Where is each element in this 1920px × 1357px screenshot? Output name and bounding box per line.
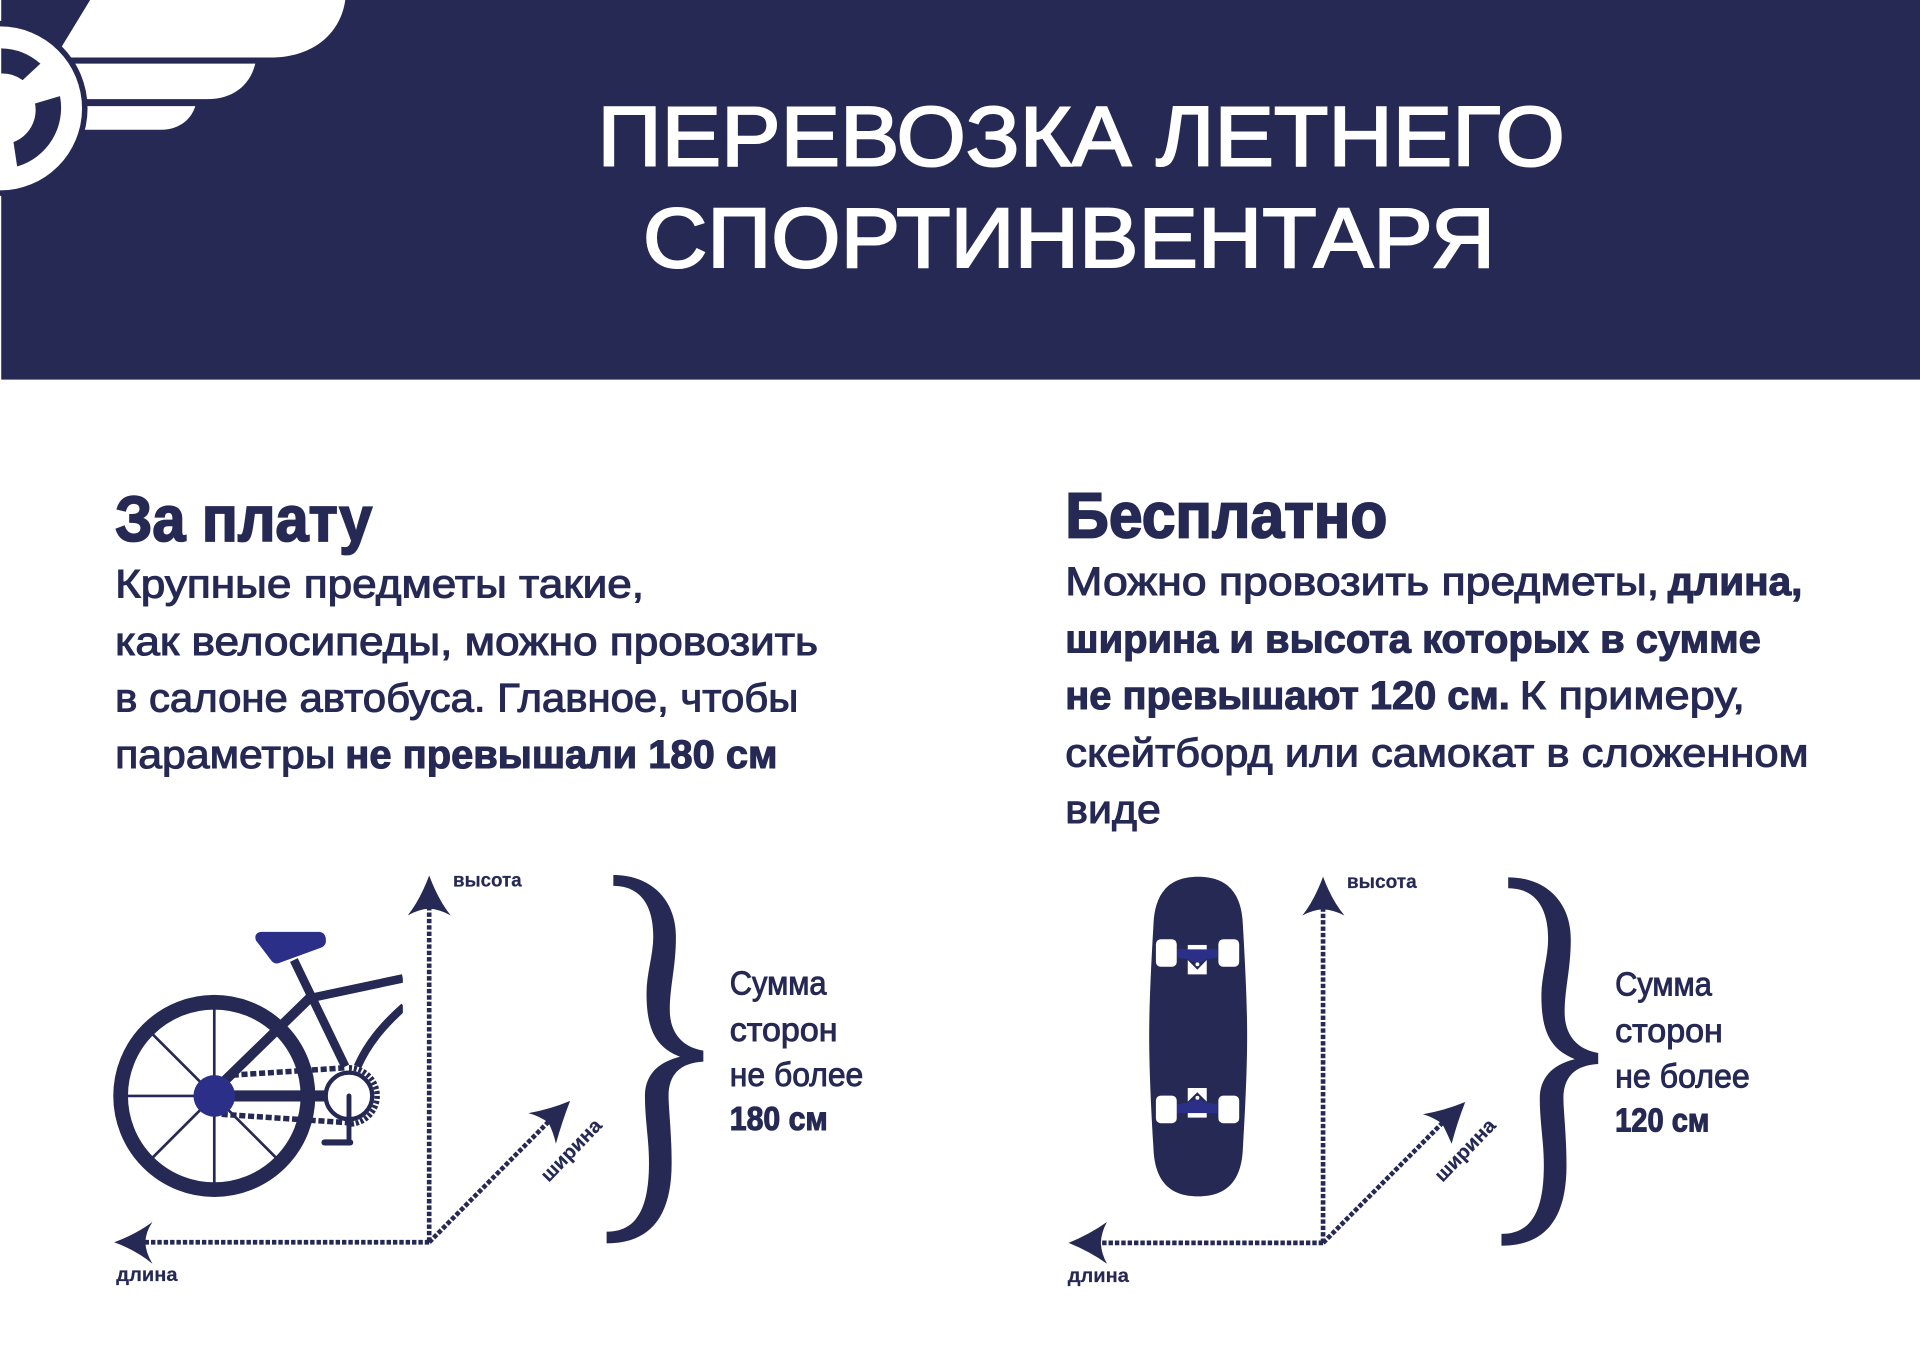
text block: free description: Можно провозить предметы, — [1065, 560, 1659, 604]
arrow: length — [114, 1222, 429, 1264]
brace — [1501, 877, 1598, 1246]
text block: sum of sides 180: сторон — [730, 1012, 838, 1049]
text block: sum of sides 180 — [730, 965, 863, 1138]
text block: paid description: не превышали 180 см — [345, 733, 778, 777]
text block: paid description — [115, 563, 818, 777]
text block: paid description: Крупные предметы такие, — [115, 563, 644, 607]
text block: free description: ширина и высота которых в сумме — [1065, 618, 1761, 662]
panel: free transport — [1065, 481, 1809, 1287]
text block: paid description: как велосипеды, можно провозить — [115, 620, 818, 664]
text block: free description: не превышают 120 см. — [1065, 674, 1510, 718]
panel: paid transport — [114, 484, 863, 1286]
brace — [607, 875, 703, 1243]
label: height: высота — [453, 870, 523, 892]
arrow: width — [1323, 1102, 1465, 1243]
text block: free description: длина, — [1668, 560, 1802, 604]
label: length: длина — [1068, 1265, 1130, 1287]
text block: free description: виде — [1065, 788, 1161, 832]
title — [598, 89, 1565, 285]
text block: paid description: в салоне автобуса. Главное, чтобы — [115, 676, 798, 720]
title: СПОРТИНВЕНТАРЯ — [643, 191, 1495, 285]
text block: sum of sides 120: 120 см — [1615, 1102, 1709, 1139]
header banner — [0, 0, 1920, 380]
label: width: ширина — [1430, 1114, 1501, 1186]
text block: sum of sides 120: не более — [1615, 1058, 1750, 1095]
text block: sum of sides 180: 180 см — [730, 1101, 828, 1138]
label: length: длина — [116, 1264, 179, 1286]
icon: bicycle rear — [120, 932, 404, 1190]
text block: sum of sides 180: не более — [730, 1057, 863, 1094]
logo: winged wheel — [0, 0, 345, 196]
text block: sum of sides 120: сторон — [1615, 1013, 1723, 1050]
title: ПЕРЕВОЗКА ЛЕТНЕГО — [598, 89, 1565, 183]
text block: paid description: параметры — [115, 733, 336, 777]
label: width: ширина — [536, 1114, 607, 1186]
text block: sum of sides 120: Сумма — [1615, 967, 1712, 1004]
heading: free: Бесплатно — [1065, 481, 1387, 552]
arrow: height — [1302, 877, 1344, 1243]
text block: free description: скейтборд или самокат в сложенном — [1065, 732, 1809, 776]
arrow: width — [429, 1101, 570, 1242]
label: height: высота — [1347, 871, 1418, 893]
text block: free description — [1065, 560, 1809, 832]
heading: paid: За плату — [115, 484, 373, 555]
icon: skateboard — [1149, 877, 1247, 1196]
text block: free description: К примеру, — [1520, 674, 1745, 718]
text block: sum of sides 120 — [1615, 967, 1750, 1139]
arrow: length — [1069, 1222, 1323, 1264]
text block: sum of sides 180: Сумма — [730, 965, 827, 1002]
arrow: height — [408, 876, 451, 1242]
